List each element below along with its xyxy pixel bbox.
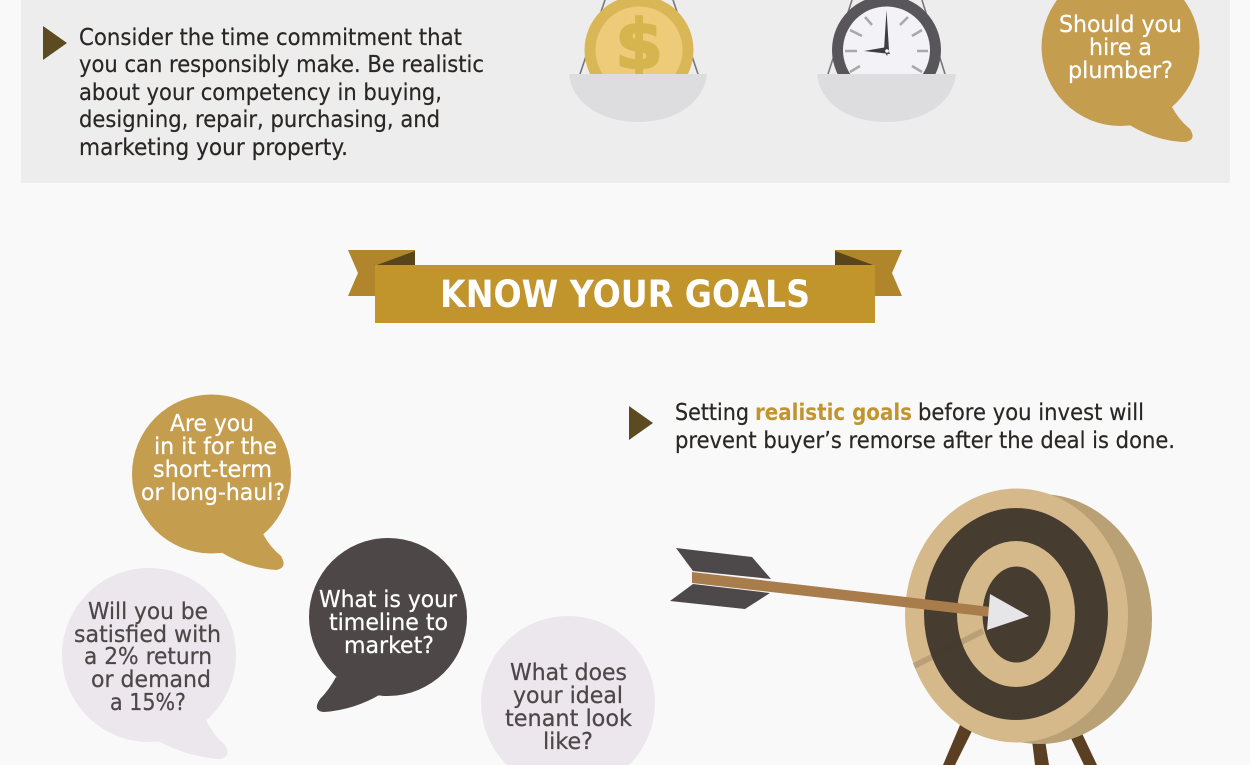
- icon: scale pan with coin: $: [615, 6, 663, 85]
- heading banner: know your goals: KNOW YOUR GOALS: [440, 273, 810, 316]
- callout: return expectation: satisfied with: [74, 622, 221, 648]
- panel: time commitment: [21, 0, 1230, 183]
- icon: arrow: [670, 548, 1029, 630]
- text block: realistic goals: realistic goals: [755, 400, 912, 426]
- callout: short-term or long-haul: short-term: [153, 457, 272, 483]
- callout: should you hire a plumber: Should you: [1059, 12, 1182, 38]
- callout: short-term or long-haul: [132, 394, 291, 570]
- icon: scale pan with coin: [569, 0, 707, 122]
- callout: timeline to market: [309, 538, 467, 712]
- illustration: target with arrow: [670, 488, 1152, 765]
- callout: return expectation: Will you be: [88, 599, 208, 625]
- text block: time commitment advice: you can responsibly make. Be realistic: [79, 52, 484, 78]
- callout: should you hire a plumber: plumber?: [1068, 58, 1173, 84]
- callout: return expectation: [62, 568, 236, 759]
- text block: time commitment advice: [79, 25, 484, 161]
- callout: return expectation: a 15%?: [110, 690, 186, 716]
- callout: ideal tenant: What does: [510, 660, 627, 686]
- callout: should you hire a plumber: [1042, 0, 1200, 142]
- callout: short-term or long-haul: Are you: [170, 411, 254, 437]
- text block: realistic goals: [675, 400, 1175, 454]
- icon: target legs: [943, 725, 1097, 765]
- text block: realistic goals: Setting: [675, 400, 749, 426]
- text block: time commitment advice: designing, repair, purchasing, and: [79, 107, 440, 133]
- callout: return expectation: or demand: [91, 667, 211, 693]
- icon: triangle bullet: [43, 26, 67, 60]
- text block: time commitment advice: about your competency in buying,: [79, 80, 442, 106]
- callout: short-term or long-haul: in it for the: [154, 434, 277, 460]
- callout: short-term or long-haul: or long-haul?: [141, 480, 285, 506]
- callout: ideal tenant: like?: [543, 729, 593, 755]
- text block: realistic goals: prevent buyer’s remorse after the deal is done.: [675, 428, 1175, 454]
- text block: time commitment advice: marketing your property.: [79, 135, 348, 161]
- heading banner: know your goals: [348, 250, 902, 323]
- callout: ideal tenant: tenant look: [505, 706, 633, 732]
- icon: triangle bullet: [629, 406, 653, 440]
- callout: ideal tenant: [481, 616, 655, 765]
- callout: timeline to market: market?: [344, 633, 434, 659]
- callout: timeline to market: timeline to: [329, 610, 448, 636]
- text block: time commitment advice: Consider the time commitment that: [79, 25, 462, 51]
- callout: ideal tenant: your ideal: [513, 683, 623, 709]
- icon: scale pan with clock: [817, 0, 956, 122]
- callout: return expectation: a 2% return: [84, 644, 212, 670]
- text block: realistic goals: before you invest will: [918, 400, 1144, 426]
- icon: target board: [905, 488, 1152, 744]
- callout: timeline to market: What is your: [319, 587, 458, 613]
- callout: should you hire a plumber: hire a: [1089, 35, 1152, 61]
